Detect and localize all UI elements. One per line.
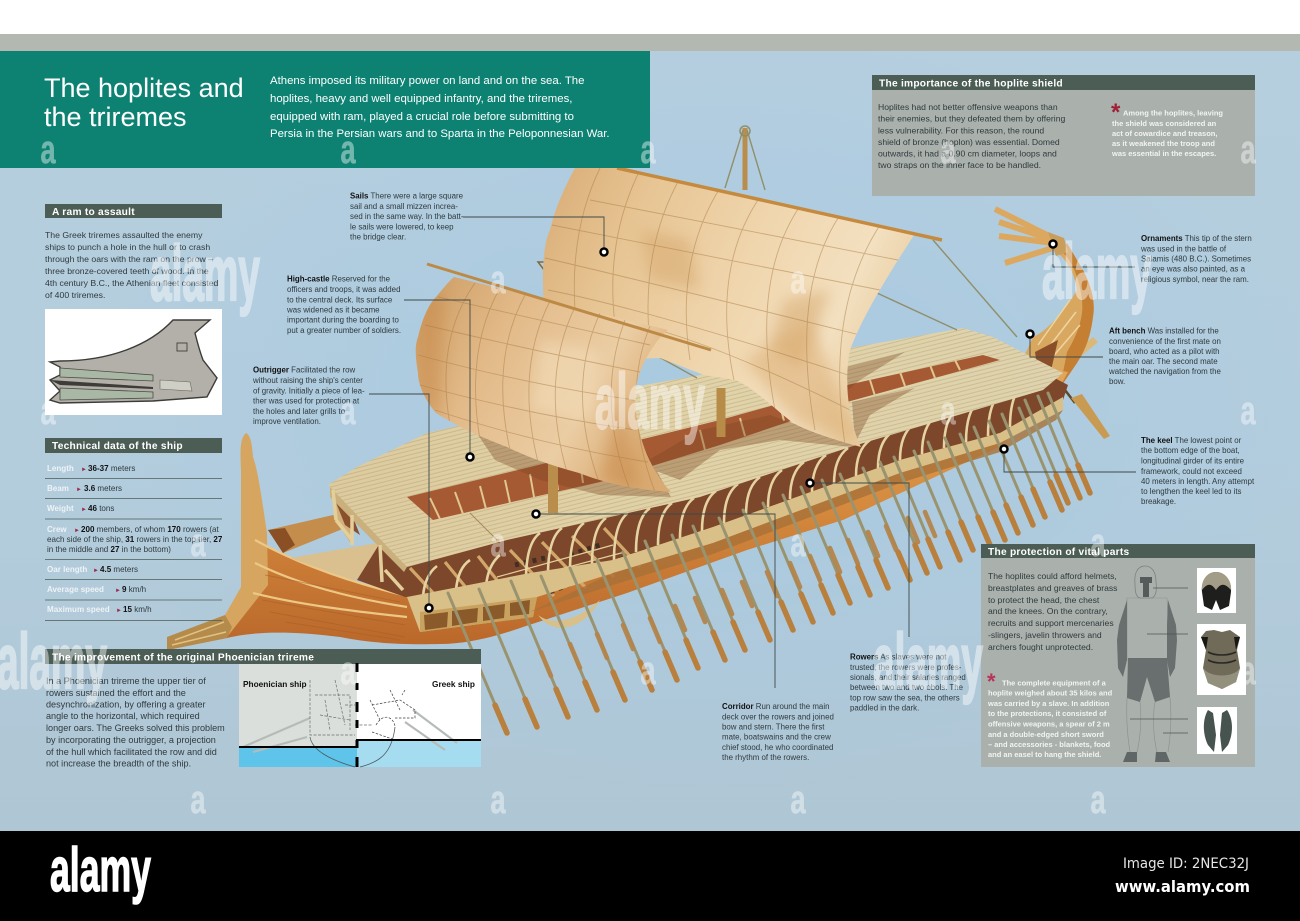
callout: corridor: chief stood, he who coordinated [722, 743, 833, 752]
panel: Phoenician trireme improvement: not increase the breadth of the ship. [46, 758, 191, 768]
callout: keel: breakage. [1141, 497, 1176, 506]
callout: corridor: bow and stern. There the first [722, 722, 825, 732]
panel: technical data: 36-37 [88, 464, 109, 473]
callout: sails: the bridge clear. [350, 232, 406, 242]
callout: outrigger: improve ventilation. [253, 417, 321, 426]
callout: aft bench [1026, 326, 1221, 386]
trireme illustration [167, 126, 1110, 733]
panel: importance of hoplite shield: their enemies, but they defeated them by offering [878, 114, 1066, 124]
panel: technical data: 31 rowers in the top tier, 27 [125, 535, 222, 544]
panel: technical data: ► [76, 487, 82, 493]
stock footer band: Image ID: 2NEC32J [1123, 856, 1249, 872]
oar gallery [357, 372, 1068, 632]
watermarks [0, 128, 1256, 822]
panel: technical data: km/h [126, 585, 146, 594]
stock footer band: alamy [50, 836, 151, 905]
callout: outrigger: the holes and later grills to [253, 407, 346, 416]
callout: aft bench: Aft bench [1109, 326, 1146, 336]
callout: keel: framework, could not exceed [1141, 467, 1242, 476]
callout: ornaments: an eye was also painted, as a [1141, 264, 1246, 274]
callout: ornaments: This tip of the stern [1183, 234, 1252, 243]
panel: Phoenician trireme improvement: rowers sustained the effort and the [46, 688, 186, 698]
callout: high-castle: High-castle [287, 274, 330, 284]
callout: high-castle: officers and troops, it was added [287, 285, 400, 294]
watermarks: alamy [150, 229, 260, 317]
stock footer band [0, 831, 1300, 921]
callout: ornaments: Ornaments [1141, 234, 1183, 243]
panel: technical data: Crew [47, 525, 67, 534]
callout: keel [1000, 436, 1255, 506]
callout: keel: The lowest point or [1173, 436, 1242, 445]
panel: technical data: tons [97, 504, 114, 513]
watermarks: a [790, 521, 806, 565]
note: and an easel to hang the shield. [988, 750, 1101, 759]
panel: a ram to assault: The Greek triremes assaulted the enemy [45, 230, 203, 240]
panel: technical data: Average speed [47, 585, 104, 594]
note: Among the hoplites, leaving [1123, 108, 1223, 118]
callout: outrigger [252, 366, 432, 612]
intro text: Athens imposed its military power on land and on the sea. The [270, 75, 584, 87]
note: as it weakened the troop and [1112, 139, 1215, 148]
callout: sails: Sails [350, 192, 369, 200]
panel: protection of vital parts: The hoplites could afford helmets, [988, 571, 1117, 581]
panel: technical data [45, 438, 225, 620]
callout: corridor: the rhythm of the rowers. [722, 753, 809, 762]
watermarks: a [340, 128, 356, 172]
panel: technical data: km/h [132, 605, 152, 614]
panel: technical data: Weight [47, 504, 74, 513]
icon: bronze ram [45, 309, 222, 415]
main deck [328, 328, 1063, 590]
panel: importance of hoplite shield: outwards, it had a 0.90 cm diameter, loops and [878, 148, 1057, 158]
masts [538, 126, 1017, 513]
note: was carried by a slave. In addition [987, 699, 1110, 708]
callout: keel: the bottom edge of the boat, [1141, 446, 1240, 455]
note: hoplite weighed about 35 kilos and [988, 688, 1113, 698]
front sail [410, 264, 711, 500]
watermarks: a [1090, 778, 1106, 822]
panel: importance of hoplite shield: less vulnerability. For this reason, the round [878, 126, 1044, 136]
panel: technical data: members, of whom 170 rowers (at [97, 525, 219, 534]
figure: hoplite [1117, 566, 1188, 762]
note: * [1111, 99, 1121, 126]
note: * [987, 669, 996, 694]
panel: technical data: ► [74, 528, 80, 534]
note: The complete equipment of a [1002, 678, 1107, 688]
watermarks: a [940, 389, 956, 433]
note: offensive weapons, a spear of 2 m [988, 720, 1110, 728]
callout: rowers: As slaves were not [879, 652, 947, 662]
watermarks: alamy [595, 357, 705, 445]
callout: corridor: Corridor [722, 702, 754, 711]
panel: a ram to assault: ships to punch a hole in the hull or to crash [45, 242, 210, 252]
panel: a ram to assault: A ram to assault [52, 207, 135, 218]
watermarks: a [490, 778, 506, 822]
callout: corridor: mate, boatswains and the crew [722, 732, 831, 742]
watermarks: a [1240, 128, 1256, 172]
callout: rowers [806, 480, 966, 712]
panel: importance of hoplite shield [872, 75, 1255, 196]
callout: rowers: trusted, the rowers were profes- [850, 663, 962, 672]
deck opening [407, 355, 1000, 520]
panel: technical data: meters [111, 565, 138, 574]
panel: technical data: ► [116, 608, 122, 614]
panel: technical data: Beam [47, 484, 69, 493]
watermarks: a [1090, 521, 1106, 565]
note [1111, 99, 1223, 158]
title band [0, 51, 650, 168]
callout: keel: The keel [1141, 436, 1173, 445]
callout: rowers: between two and two obols. The [850, 683, 964, 692]
callout: sails: There were a large square [368, 192, 464, 200]
callout: high-castle: important during the boarding to [287, 316, 399, 324]
steering oar [1058, 337, 1110, 439]
stock footer band: www.alamy.com [1115, 877, 1250, 896]
watermarks: alamy [0, 617, 107, 705]
oars [448, 393, 1090, 733]
callout: ornaments: Salamis (480 B.C.). Sometimes [1141, 254, 1251, 264]
panel: a ram to assault [45, 204, 222, 415]
callout: sails: le sails were lowered, to keep [350, 222, 454, 232]
callout: ornaments: religious symbol, near the ram. [1141, 275, 1249, 284]
callout: high-castle: was widened as it became [286, 306, 380, 314]
panel: technical data: 9 [122, 585, 127, 594]
panel: protection of vital parts: archers fought unprotected. [988, 642, 1093, 652]
callout: rowers: paddled in the dark. [850, 704, 919, 712]
panel: a ram to assault: of 400 triremes. [45, 290, 105, 300]
callout: aft bench: convenience of the first mate on [1109, 337, 1221, 346]
panel: technical data: meters [109, 464, 135, 473]
main hull [167, 360, 1068, 650]
callout: high-castle: to the central deck. Its surface [287, 296, 393, 304]
callout: keel: to lengthen the keel led to its [1141, 487, 1242, 496]
panel: technical data: in the middle and [47, 545, 111, 554]
note: to the protections, it consisted of [988, 709, 1107, 718]
callout: corridor: deck over the rowers and joined [722, 712, 834, 722]
panel: a ram to assault: 4th century B.C., the Athenian fleet consisted [45, 278, 219, 288]
intro text: hoplites, heavy and well equipped infantry, and the triremes, [270, 93, 572, 105]
panel: technical data: 15 [123, 605, 132, 614]
watermarks: a [1240, 389, 1256, 433]
title: the triremes [44, 102, 187, 132]
watermarks: a [790, 778, 806, 822]
panel: technical data: 4.5 [100, 565, 112, 574]
panel: Phoenician trireme improvement: In a Phoenician trireme the upper tier of [46, 676, 206, 686]
panel: protection of vital parts: and the knees. On the contrary, [988, 606, 1108, 616]
panel: protection of vital parts: The protection of vital parts [988, 547, 1129, 558]
outrigger [407, 397, 1063, 632]
panel: technical data: Maximum speed [47, 605, 110, 614]
diagram: ship cross-sections [239, 663, 481, 767]
note: – and accessories - blankets, food [988, 740, 1111, 749]
panel: Phoenician trireme improvement [45, 649, 481, 768]
panel: technical data: ► [81, 467, 87, 473]
panel: technical data: 27 in the bottom) [111, 545, 171, 554]
callout: corridor [532, 510, 834, 762]
panel: protection of vital parts [981, 544, 1255, 767]
rear sail [530, 160, 942, 460]
callout: sails [350, 192, 608, 256]
diagram: ship cross-sections: Greek ship [432, 679, 475, 689]
panel: technical data: ► [81, 507, 87, 513]
panel: protection of vital parts: -slingers, javelin throwers and [988, 630, 1102, 640]
watermarks: a [940, 128, 956, 172]
intro text: Persia in the Persian wars and to Sparta in the Peloponnesian War. [270, 128, 610, 140]
panel: technical data: Length [47, 464, 74, 473]
callout: rowers: Rowers [850, 652, 879, 662]
panel: technical data: Technical data of the ship [52, 441, 183, 452]
callout: outrigger: without raising the ship's center [252, 376, 363, 385]
callout: corridor: Run around the main [754, 702, 829, 711]
callout: high-castle: Reserved for the [330, 274, 391, 284]
panel: technical data: each side of the ship, [47, 535, 125, 544]
panel: technical data: ► [93, 568, 99, 574]
title: The hoplites and [44, 73, 244, 103]
callout: high-castle: put a greater number of soldiers. [287, 326, 401, 335]
note: and a double-edged short sword [988, 730, 1104, 739]
callout: rowers: sionals, and their salaries ranged [850, 673, 966, 682]
callout: sails: sail and a small mizzen increa- [350, 202, 458, 211]
panel: Phoenician trireme improvement: of the hull which facilitated the row and did [46, 747, 217, 757]
panel: Phoenician trireme improvement: longer oars. The Greeks solved this problem [46, 723, 225, 733]
callout: aft bench: board, who acted as a pilot with [1109, 347, 1220, 356]
callout: sails: sed in the same way. In the batt- [350, 212, 464, 221]
panel: Phoenician trireme improvement: desynchronization, by offering a greater [46, 700, 206, 710]
icon: helmet [1197, 568, 1236, 613]
watermarks: a [40, 389, 56, 433]
panel: technical data: 3.6 [84, 484, 96, 493]
callout: aft bench: bow. [1109, 377, 1125, 386]
stern post and fan ornament [995, 209, 1094, 390]
callout: rowers: top row saw the sea, the others [850, 694, 960, 702]
note: was essential in the escapes. [1111, 149, 1216, 158]
watermarks: a [490, 258, 506, 302]
panel: importance of hoplite shield: The importance of the hoplite shield [879, 78, 1063, 90]
note [987, 669, 1113, 759]
callout: aft bench: Was installed for the [1145, 326, 1219, 336]
watermarks: a [640, 128, 656, 172]
intro text: equipped with ram, played a crucial role before submitting to [270, 111, 574, 123]
watermarks: a [790, 258, 806, 302]
panel: protection of vital parts: recruits and support mercenaries [988, 618, 1114, 628]
callout: keel: longitudinal girder of its entire [1141, 456, 1245, 466]
panel: technical data: meters [95, 484, 122, 493]
callout: ornaments: was used in the battle of [1140, 244, 1227, 254]
panel: a ram to assault: through the oars with the ram on the prow – [45, 254, 213, 264]
watermarks: a [190, 521, 206, 565]
panel: Phoenician trireme improvement: by incorporating the outrigger, a projection [46, 735, 216, 745]
watermarks: a [190, 778, 206, 822]
watermarks: alamy [1042, 227, 1152, 315]
callout: outrigger: of gravity. Initially a piece of lea- [253, 386, 365, 396]
callout: aft bench: the main oar. The second mate [1109, 357, 1218, 366]
icon: greaves [1197, 707, 1237, 754]
panel: technical data: 46 [88, 504, 97, 513]
panel: importance of hoplite shield: Hoplites had not better offensive weapons than [878, 102, 1058, 112]
watermarks: a [340, 389, 356, 433]
diagram: ship cross-sections: Phoenician ship [243, 679, 307, 689]
note: the shield was considered an [1112, 119, 1217, 128]
callout: high-castle [286, 274, 474, 460]
panel: importance of hoplite shield: shield of bronze (hoplon) was essential. Domed [878, 137, 1060, 147]
panel: technical data: ► [115, 588, 121, 594]
panel: importance of hoplite shield: two straps on the inner face to be handled. [878, 160, 1041, 170]
panel: protection of vital parts: to protect the head, the chest [988, 595, 1100, 605]
callout: outrigger: ther was used for protection at [253, 396, 360, 406]
panel: Phoenician trireme improvement: angle to the horizontal, which required [46, 711, 200, 721]
callout: outrigger: Outrigger [253, 366, 289, 374]
watermarks: a [1240, 649, 1256, 693]
watermarks: alamy [873, 617, 983, 705]
watermarks: a [340, 649, 356, 693]
panel: technical data: 200 [81, 525, 95, 534]
panel: Phoenician trireme improvement: The improvement of the original Phoenician trireme [52, 652, 314, 664]
panel: a ram to assault: three bronze-covered teeth of wood. In the [45, 266, 209, 276]
callout: ornaments [1050, 234, 1252, 284]
watermarks: a [40, 128, 56, 172]
watermarks: a [640, 649, 656, 693]
callout: keel: 40 meters in length. Any attempt [1141, 477, 1255, 486]
panel: technical data: Oar length [47, 565, 87, 574]
note: act of cowardice and treason, [1112, 129, 1217, 138]
panel: protection of vital parts: breastplates and greaves of brass [988, 583, 1117, 593]
icon: breastplate [1197, 624, 1246, 695]
callout: aft bench: watched the navigation from the [1108, 367, 1221, 376]
sail shadows on deck [478, 352, 915, 497]
callout: outrigger: Facilitated the row [289, 366, 355, 374]
watermarks: a [490, 521, 506, 565]
